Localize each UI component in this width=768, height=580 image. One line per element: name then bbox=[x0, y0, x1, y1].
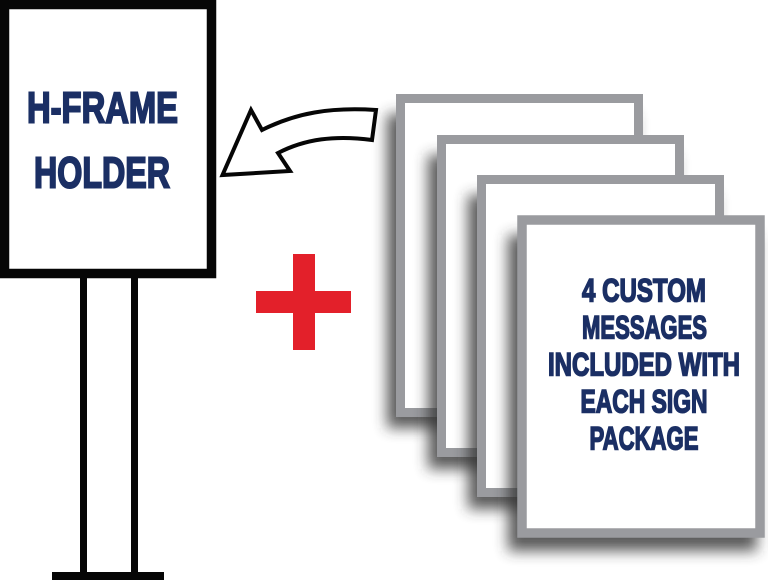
holder label bbox=[27, 83, 178, 197]
card message: 4 CUSTOM bbox=[582, 272, 706, 308]
red plus sign bbox=[256, 254, 351, 350]
card 1 bbox=[387, 98, 638, 428]
card 2 bbox=[428, 140, 680, 469]
stack of message cards bbox=[387, 98, 760, 551]
holder label: H-FRAME bbox=[27, 83, 178, 132]
card message: MESSAGES bbox=[582, 309, 707, 345]
card 4 bbox=[508, 220, 760, 551]
card 3 bbox=[468, 180, 720, 509]
left post bbox=[80, 277, 87, 573]
arrow pointing to holder bbox=[222, 109, 376, 175]
sign frame bbox=[4, 4, 212, 274]
card message: PACKAGE bbox=[590, 420, 698, 456]
sign holder: H-frame bbox=[4, 4, 212, 580]
card message: EACH SIGN bbox=[580, 383, 708, 419]
holder label: HOLDER bbox=[34, 148, 170, 197]
right post bbox=[131, 277, 138, 573]
card message bbox=[548, 272, 740, 456]
ground bar bbox=[52, 572, 164, 580]
